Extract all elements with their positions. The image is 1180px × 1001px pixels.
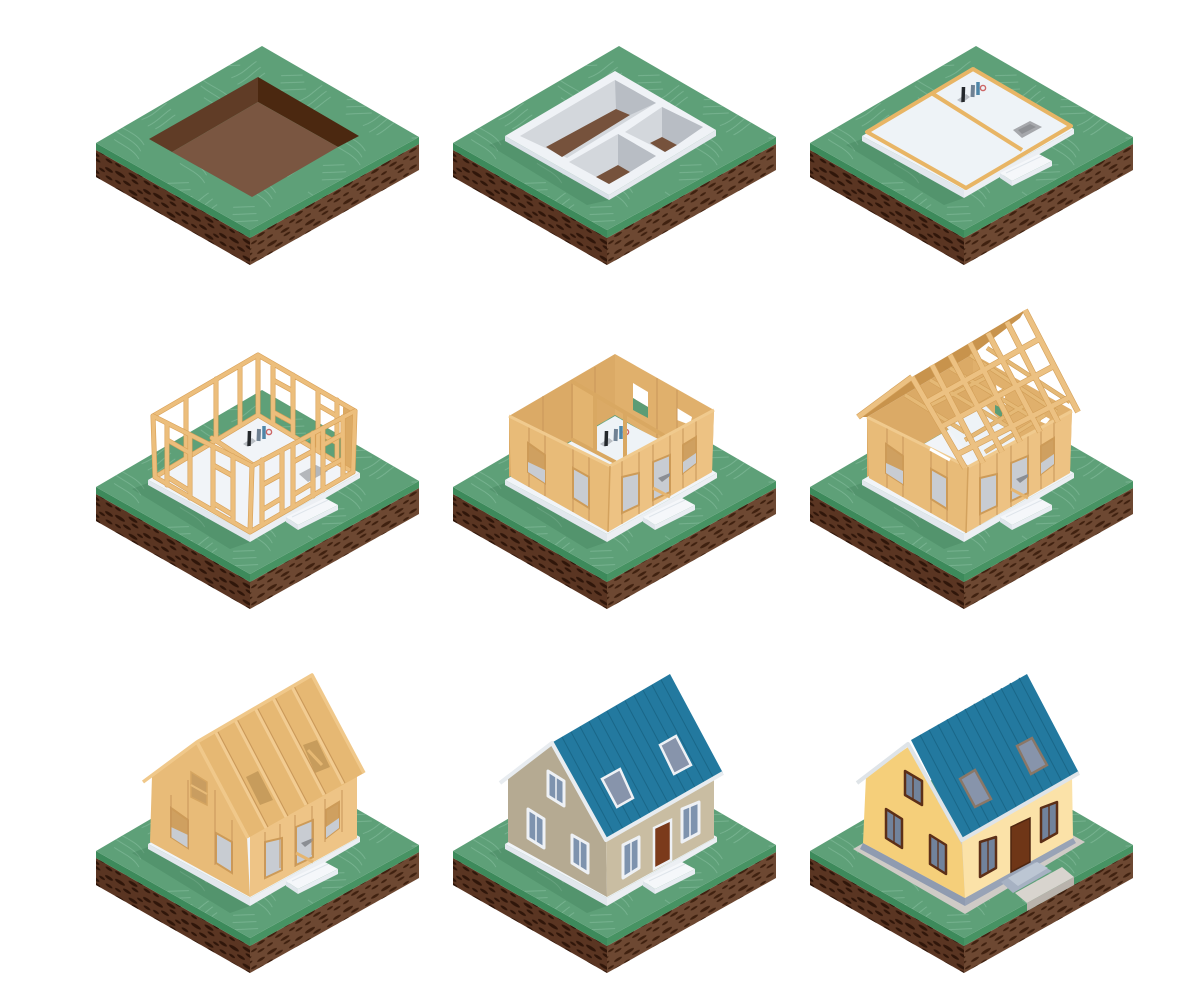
panel: stage 3 floor slab with sill plate <box>810 46 1133 265</box>
panel: stage 8 beige house with blue roof <box>453 674 776 973</box>
panel: stage 5 sheathed timber walls <box>453 354 776 609</box>
panel: stage 6 roof trusses <box>810 310 1133 609</box>
panel: stage 4 open timber wall frame <box>96 355 419 609</box>
panel: stage 1 excavated pit <box>96 46 419 265</box>
panel: stage 2 concrete foundation <box>453 46 776 265</box>
panel: stage 9 finished yellow house <box>810 674 1133 973</box>
panel: stage 7 sheathed roof <box>96 675 419 973</box>
